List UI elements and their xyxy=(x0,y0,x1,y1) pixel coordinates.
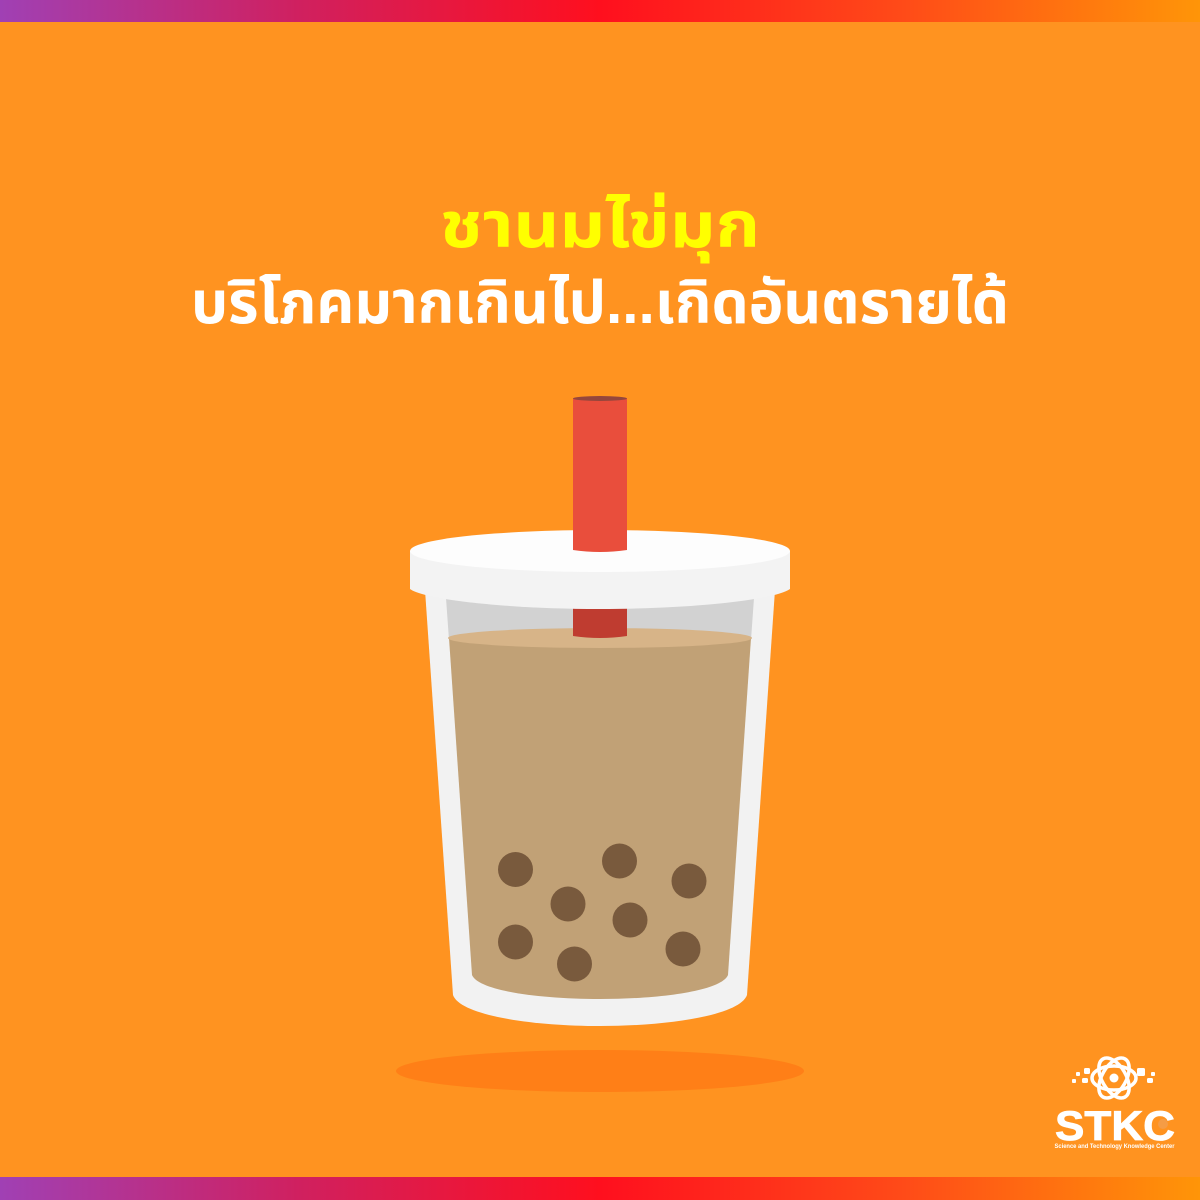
lid top xyxy=(410,530,790,572)
illustration: bubble tea cup xyxy=(410,396,790,1026)
straw above lid xyxy=(573,398,627,552)
milk tea liquid xyxy=(449,638,751,999)
cup body xyxy=(425,590,775,1026)
tapioca pearls xyxy=(498,844,706,982)
ground shadow xyxy=(396,1050,804,1092)
logo wordmark: STKC xyxy=(1055,1102,1175,1149)
cup empty window xyxy=(446,598,754,640)
bottom gradient bar xyxy=(0,1177,1200,1200)
logo C dot xyxy=(1158,1119,1168,1129)
logo side dots xyxy=(1072,1068,1155,1083)
top gradient bar xyxy=(0,0,1200,22)
logo tagline: Science and Technology Knowledge Center xyxy=(1054,1144,1175,1150)
logo: STKC xyxy=(1054,1053,1175,1150)
title: ชานมไข่มุก xyxy=(440,189,760,264)
straw inside cup xyxy=(573,600,627,638)
lid rim xyxy=(410,551,790,609)
straw opening xyxy=(573,396,627,401)
logo atom emblem xyxy=(1092,1053,1136,1103)
liquid surface xyxy=(448,628,752,648)
subtitle: บริโภคมากเกินไป...เกิดอันตรายได้ xyxy=(191,269,1009,336)
